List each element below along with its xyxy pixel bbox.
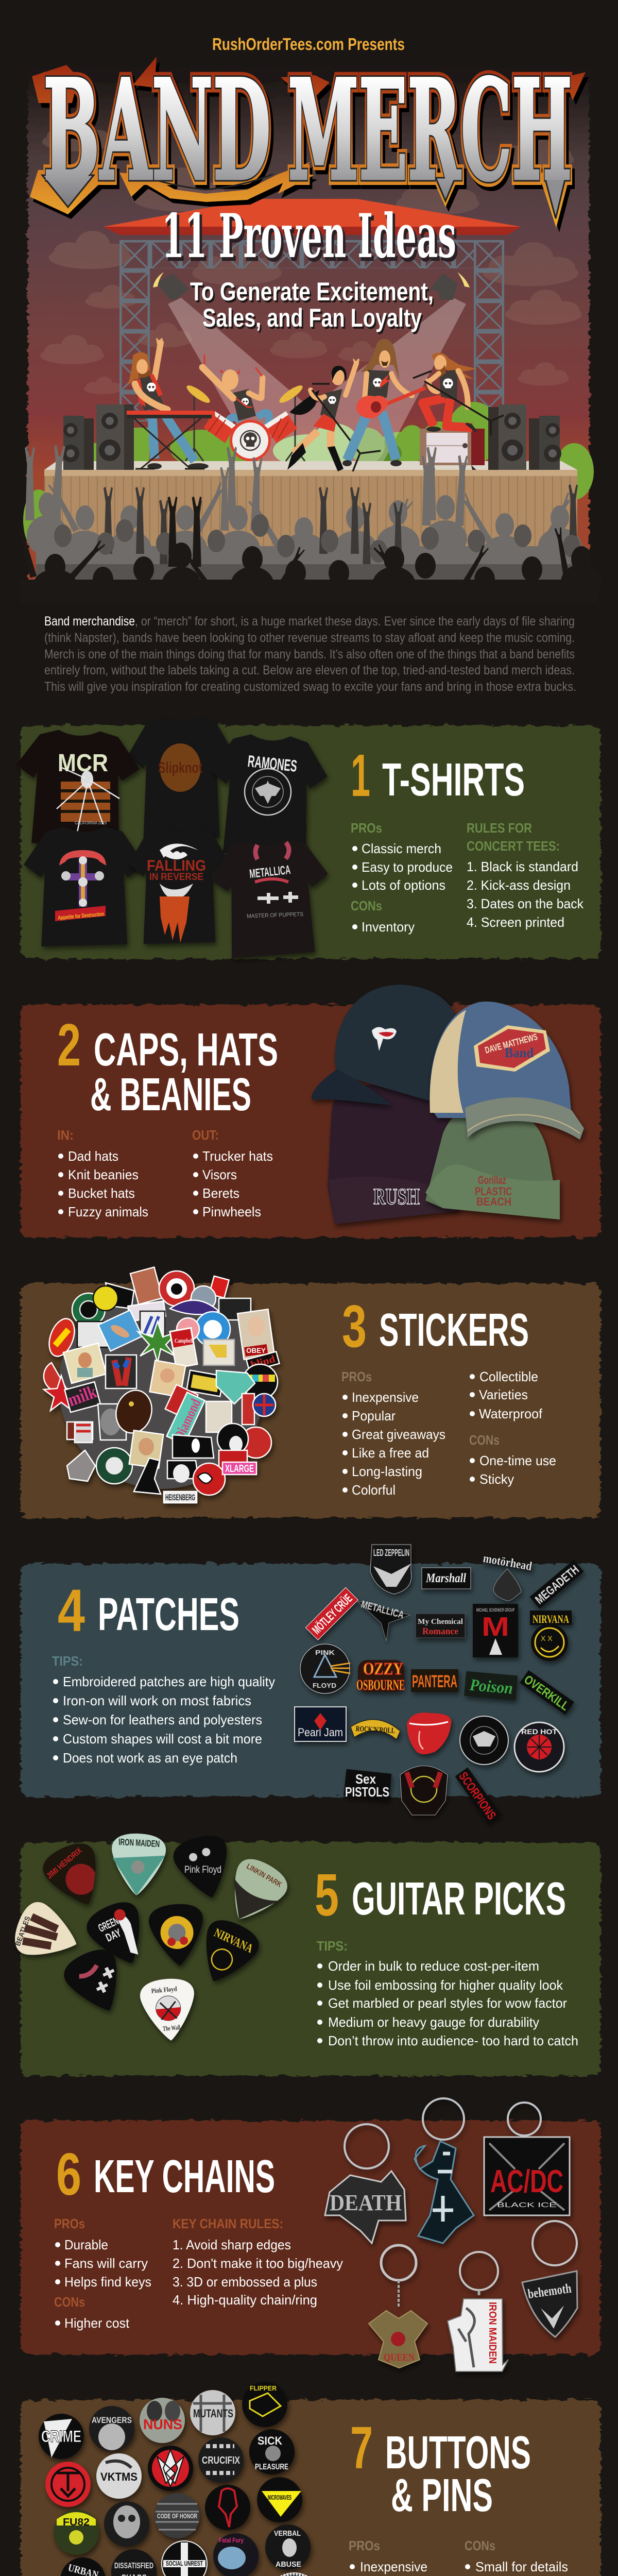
out list: Pinwheels	[202, 1204, 261, 1219]
patch: Nirvana: NIRVANA	[533, 1613, 569, 1625]
shirt: Metallica: MASTER OF PUPPETS	[247, 911, 303, 920]
pros and cons list	[54, 2216, 151, 2331]
tagline	[190, 277, 435, 334]
punk buttons: VERBAL	[274, 2529, 301, 2538]
patch: Rock N Roll	[351, 1720, 400, 1739]
out list: Visors	[202, 1167, 237, 1182]
heading: 1 T-Shirts: 1	[351, 742, 370, 809]
tips list: Iron-on will work on most fabrics	[63, 1693, 251, 1708]
main title: Band Merch: BAND	[43, 49, 271, 212]
patch: Marshall	[422, 1568, 471, 1589]
patch: Poison: Poison	[469, 1675, 513, 1698]
patch: Rock N Roll: ROCK'N'ROLL	[355, 1725, 395, 1735]
key chain: Queen: QUEEN	[384, 2352, 415, 2363]
more pros and cons list: Varieties	[479, 1387, 528, 1402]
patch: My Chemical Romance	[416, 1614, 465, 1638]
shirt: Metallica: METALLICA	[249, 863, 291, 881]
shirt: Falling in Reverse: IN REVERSE	[149, 872, 203, 883]
intro paragraph: Band merchandise	[44, 614, 135, 629]
crowd: back row	[25, 445, 587, 587]
shirt: Falling in Reverse	[129, 826, 230, 944]
punk buttons: SOCIAL UNREST	[166, 2560, 203, 2567]
tips list: Use foil embossing for higher quality look	[328, 1977, 563, 1993]
rules for concert tees	[467, 820, 584, 930]
tips list: TIPS:	[317, 1938, 348, 1954]
sticker bomb collage	[44, 1267, 279, 1503]
panel background	[21, 1005, 600, 1238]
main title: Band Merch: BAND	[43, 49, 271, 212]
shirt: Metallica	[209, 837, 332, 959]
green beanie: Gorillaz	[478, 1174, 506, 1187]
pros list: Great giveaways	[352, 1427, 445, 1442]
heading: 1 T-Shirts	[351, 742, 525, 809]
heading: 1 T-Shirts: T-SHIRTS	[382, 754, 525, 806]
sticker bomb collage: XLARGE	[225, 1463, 254, 1475]
panel 1: t-shirts	[13, 716, 600, 959]
pros and cons list: PROs	[351, 820, 382, 836]
punk buttons: FLIPPER	[250, 2384, 277, 2392]
key chain rules: 1. Avoid sharp edges	[173, 2237, 291, 2252]
pick: Pink Floyd	[170, 1831, 238, 1905]
punk buttons: MICROWAVES	[268, 2494, 291, 2501]
patch: Scorpions	[455, 1768, 501, 1823]
stage deck	[44, 461, 577, 564]
sticker bomb collage: OBEY	[246, 1346, 266, 1354]
patch: Ramones seal	[460, 1716, 508, 1765]
punk buttons: CRIME	[41, 2427, 81, 2446]
presenter line: RushOrderTees.com Presents	[212, 35, 405, 54]
out list: Trucker hats	[202, 1148, 273, 1164]
crowd: middle row	[104, 484, 578, 569]
pros list	[349, 2538, 447, 2576]
pros list: Colorful	[352, 1482, 396, 1498]
pick: The Wall	[139, 1977, 198, 2043]
sticker bomb collage: HEISENBERG	[165, 1493, 195, 1502]
tips list: Custom shapes will cost a bit more	[63, 1731, 262, 1747]
punk buttons: AVENGERS	[92, 2415, 132, 2425]
purple beanie	[328, 1084, 459, 1224]
pros list: Inexpensive	[360, 2559, 427, 2574]
patch: Megadeth	[529, 1560, 584, 1608]
panel 3: stickers	[21, 1267, 600, 1518]
punk buttons: MUTANTS	[193, 2407, 233, 2420]
key chain: Queen	[369, 2245, 427, 2368]
heading: 2 Caps, Hats & Beanies: 2	[57, 1011, 81, 1078]
pick: Jimi Hendrix: JIMI HENDRIX	[45, 1846, 84, 1881]
patch: Pearl Jam	[295, 1707, 346, 1741]
patch: Slayer	[400, 1766, 448, 1815]
key chain rules: 3. 3D or embossed a plus	[173, 2274, 317, 2290]
pick: Metallica	[59, 1943, 134, 2022]
patch: Pantera: PANTERA	[412, 1672, 457, 1691]
pros list: PROs	[341, 1369, 372, 1384]
drum kit	[184, 383, 305, 461]
more pros and cons list: Collectible	[479, 1369, 538, 1384]
rules for concert tees: 2. Kick-ass design	[467, 877, 571, 893]
pick: Green Day	[81, 1895, 157, 1975]
pick: Nirvana	[189, 1913, 264, 1993]
key chain rules: KEY CHAIN RULES:	[173, 2216, 283, 2231]
tagline: Sales, and Fan Loyalty	[204, 306, 423, 334]
key chain: AC/DC: BLACK ICE	[497, 2201, 557, 2209]
key chain: Iron Maiden	[448, 2252, 508, 2371]
panel 5: guitar picks	[9, 1831, 600, 2076]
pick: The Wall: The Wall	[162, 2023, 181, 2032]
metal key chains	[325, 2098, 577, 2371]
heading: 7 Buttons & Pins: BUTTONS	[385, 2427, 531, 2479]
patch: Sex Pistols	[344, 1769, 391, 1801]
rules for concert tees: 4. Screen printed	[467, 914, 564, 930]
cons list: Small for details	[475, 2559, 568, 2574]
tips list: Medium or heavy gauge for durability	[328, 2014, 539, 2030]
patch: Motörhead	[482, 1552, 533, 1601]
tips list	[52, 1653, 275, 1766]
pros list: Popular	[352, 1408, 396, 1423]
heading: 2 Caps, Hats & Beanies: CAPS, HATS	[94, 1024, 278, 1076]
rules for concert tees: RULES FOR	[467, 820, 532, 836]
patch: Red Hot Chili Peppers	[514, 1722, 564, 1772]
punk buttons: NUNS	[143, 2416, 182, 2432]
sticker bomb collage: blind	[250, 1353, 277, 1371]
sky backdrop	[28, 67, 589, 592]
green beanie: BEACH	[476, 1195, 511, 1208]
sticker bomb collage: milk	[65, 1381, 99, 1410]
pros and cons list: Fans will carry	[64, 2256, 148, 2271]
pros and cons list: Easy to produce	[362, 859, 453, 875]
pros and cons list: Lots of options	[362, 877, 445, 893]
cons list: CONs	[465, 2538, 495, 2553]
tagline: Sales, and Fan Loyalty	[202, 303, 422, 332]
shirt: Ramones	[206, 732, 329, 858]
pick: Beatles	[9, 1897, 85, 1970]
patch: Sex Pistols: PISTOLS	[345, 1784, 389, 1800]
pros and cons list: Higher cost	[64, 2315, 130, 2331]
t-shirt photos	[13, 716, 332, 959]
key chain: AC/DC	[484, 2103, 570, 2215]
shirt: Falling in Reverse: FALLING	[147, 857, 206, 874]
pros and cons list: Inventory	[362, 919, 415, 935]
pros list	[341, 1369, 445, 1498]
patch: Pearl Jam: Pearl Jam	[298, 1726, 343, 1739]
cons list	[465, 2538, 572, 2576]
pros and cons list: PROs	[54, 2216, 85, 2231]
sticker bomb collage: Diamond	[171, 1396, 204, 1443]
patch: Megadeth: MEGADETH	[533, 1563, 582, 1607]
heading: 3 Stickers: 3	[342, 1293, 367, 1360]
heading: 5 Guitar Picks: 5	[315, 1861, 339, 1928]
pick: Nirvana: NIRVANA	[212, 1926, 255, 1956]
tagline: To Generate Excitement,	[190, 277, 434, 306]
patch: Ozzy Osbourne	[356, 1659, 405, 1693]
pick: Jimi Hendrix	[43, 1843, 99, 1908]
pick: Guns N Roses	[147, 1902, 207, 1968]
patch: Poison	[464, 1671, 518, 1700]
patch: Nirvana	[530, 1611, 572, 1661]
heading: 4 Patches: PATCHES	[98, 1589, 239, 1640]
shirt: Slipknot	[128, 716, 235, 840]
patch: Motörhead: motörhead	[482, 1552, 533, 1573]
more pros and cons list: One-time use	[479, 1453, 556, 1468]
purple beanie: RUSH	[373, 1184, 420, 1209]
patch: Marshall: Marshall	[425, 1571, 466, 1585]
out list: Berets	[202, 1185, 239, 1201]
punk buttons: Fatal Fury	[219, 2536, 244, 2544]
shirt: MCR: MCR	[58, 750, 108, 777]
out list: OUT:	[192, 1127, 219, 1143]
tips list: Get marbled or pearl styles for wow factor	[328, 1995, 567, 2011]
patch: Ozzy Osbourne: OZZY	[363, 1659, 403, 1679]
heading: 2 Caps, Hats & Beanies	[57, 1011, 278, 1121]
patch: Overkill: OVERKILL	[521, 1672, 572, 1714]
shirt: MCR: CALIFORNIA 2019	[75, 821, 107, 825]
patch: Nirvana: X X	[541, 1634, 553, 1642]
panel background	[21, 1564, 600, 1797]
printed guitar picks	[9, 1831, 294, 2043]
key chain rules: 2. Don't make it too big/heavy	[173, 2256, 343, 2271]
amp	[420, 429, 485, 470]
heading: 6 Key Chains	[56, 2141, 275, 2208]
patch: Pink Floyd	[300, 1644, 350, 1693]
stage roof	[103, 199, 521, 235]
patch: Red Hot Chili Peppers: RED HOT	[521, 1727, 557, 1736]
rules for concert tees: CONCERT TEES:	[467, 838, 560, 854]
pros list: Long-lasting	[352, 1464, 422, 1479]
key chain: Behemoth	[522, 2221, 577, 2337]
panel background	[21, 725, 600, 959]
rules for concert tees: 3. Dates on the back	[467, 896, 584, 911]
heading: 4 Patches	[58, 1577, 239, 1644]
guitarist	[342, 339, 425, 466]
panel background	[21, 2400, 600, 2576]
patch: Motley Crue: MÖTLEY CRÜE	[310, 1591, 355, 1637]
clouds	[40, 119, 581, 394]
singer with mic	[287, 359, 381, 471]
key chain: Iron Maiden: IRON MAIDEN	[487, 2302, 498, 2364]
pick: Iron Maiden: IRON MAIDEN	[118, 1837, 160, 1849]
shirt: Guns N' Roses: Appetite for Destruction	[58, 911, 105, 921]
key chain: AC/DC: AC/DC	[490, 2164, 563, 2199]
out list	[192, 1127, 273, 1219]
key chain: Behemoth: behemoth	[527, 2281, 573, 2301]
keyboard	[127, 411, 214, 469]
shirt: Slipknot: Slipknot	[158, 759, 202, 776]
green bushes	[23, 402, 594, 551]
key chain: Death: DEATH	[330, 2190, 402, 2215]
panel 4: patches	[21, 1545, 600, 1823]
green beanie	[425, 1104, 560, 1219]
punk buttons: CODE OF HONOR	[157, 2512, 197, 2520]
panel background	[21, 1283, 600, 1518]
panel background	[21, 2121, 600, 2354]
heading: 6 Key Chains: KEY CHAINS	[94, 2151, 275, 2202]
in list: Bucket hats	[68, 1185, 135, 1201]
more pros and cons list: CONs	[469, 1432, 500, 1448]
in list: Fuzzy animals	[68, 1204, 148, 1219]
key chain: Ozzy cross	[415, 2098, 474, 2243]
subtitle: 11 Proven Ideas	[162, 200, 458, 275]
pros and cons list: Helps find keys	[64, 2274, 151, 2290]
patch: Metallica: METALLICA	[360, 1599, 405, 1621]
shirt: MCR	[13, 728, 141, 847]
punk buttons: DISSATISFIED	[114, 2562, 153, 2570]
pros list: Like a free ad	[352, 1445, 429, 1461]
heading: 4 Patches: 4	[58, 1577, 85, 1644]
pros and cons list	[351, 820, 453, 935]
pale bushes in the light	[273, 423, 385, 467]
tips list: Don’t throw into audience- too hard to catch	[328, 2033, 578, 2048]
patch: Led Zeppelin: LED ZEPPELIN	[373, 1548, 409, 1558]
speakers	[62, 404, 561, 470]
heading: 7 Buttons & Pins: 7	[350, 2414, 373, 2481]
panel background	[21, 1842, 600, 2076]
punk buttons: SICK	[258, 2434, 282, 2447]
spotlight beams	[168, 298, 466, 461]
patch: Pantera	[411, 1669, 458, 1692]
in list: Dad hats	[68, 1148, 118, 1164]
photos: caps and beanies	[312, 985, 584, 1224]
main title: Band Merch: BAND	[46, 54, 273, 216]
navy dad cap	[312, 985, 461, 1108]
patch: Led Zeppelin	[370, 1545, 411, 1594]
pick: Green Day: GREEN	[96, 1914, 121, 1935]
drummer	[202, 354, 269, 428]
tips list: Sew-on for leathers and polyesters	[63, 1712, 262, 1727]
stage lamps	[153, 272, 470, 300]
key chain: Death	[325, 2124, 406, 2243]
patch: My Chemical Romance: Romance	[422, 1626, 458, 1636]
stage truss	[119, 240, 504, 421]
pick: Green Day: DAY	[104, 1926, 123, 1944]
heading: 5 Guitar Picks	[315, 1861, 566, 1928]
more pros and cons list: Waterproof	[479, 1406, 543, 1421]
patch: MSG: M	[482, 1612, 509, 1642]
pick: Pink Floyd: Pink Floyd	[184, 1865, 221, 1875]
blue trucker cap	[430, 1002, 584, 1140]
rules for concert tees: 1. Black is standard	[467, 859, 578, 874]
hero illustration: concert stage	[16, 67, 602, 603]
pick: Beatles: BEATLES	[13, 1915, 32, 1947]
panel 6: key chains	[21, 2098, 600, 2371]
patch: MSG: MICHAEL SCHENKER GROUP	[476, 1607, 514, 1613]
tagline: To Generate Excitement,	[192, 279, 435, 308]
patch: Motley Crue	[305, 1587, 358, 1640]
key chain rules: 4. High-quality chain/ring	[173, 2292, 317, 2308]
heading: 7 Buttons & Pins	[350, 2414, 531, 2521]
pick: The Wall: Pink Floyd	[151, 1985, 178, 1995]
heading: 2 Caps, Hats & Beanies: & BEANIES	[90, 1069, 251, 1121]
patch: My Chemical Romance: My Chemical	[418, 1618, 463, 1626]
heading: 7 Buttons & Pins: & PINS	[391, 2470, 493, 2521]
panel 7: buttons and pins	[21, 2382, 600, 2576]
punk buttons: FU82	[63, 2517, 90, 2528]
embroidered band patches	[295, 1545, 584, 1823]
pick: Iron Maiden	[109, 1832, 167, 1897]
main title: Band Merch: BAND	[43, 49, 271, 212]
pros list: Inexpensive	[352, 1389, 419, 1405]
title block	[30, 35, 589, 334]
punk buttons: PLEASURE	[255, 2463, 288, 2471]
more pros and cons list	[469, 1369, 556, 1487]
green beanie: PLASTIC	[475, 1185, 512, 1198]
tips list: Order in bulk to reduce cost-per-item	[328, 1958, 539, 1974]
heading: 3 Stickers	[342, 1293, 529, 1360]
tips list: Embroidered patches are high quality	[63, 1674, 275, 1689]
punk buttons: VKTMS	[100, 2470, 138, 2483]
patch: Sex Pistols: Sex	[355, 1771, 376, 1787]
keyboard player	[128, 338, 209, 469]
pick: Linkin Park: LINKIN PARK	[245, 1862, 283, 1889]
patch: MSG	[473, 1604, 518, 1657]
tips list	[317, 1938, 578, 2048]
in list: Knit beanies	[68, 1167, 139, 1182]
patch: Rolling Stones tongue	[407, 1713, 451, 1754]
blue trucker cap: DAVE MATTHEWS	[484, 1031, 539, 1056]
tips list: TIPS:	[52, 1653, 83, 1669]
pros and cons list: CONs	[351, 898, 382, 913]
pros and cons list: Durable	[64, 2237, 108, 2252]
patch: Pink Floyd: PINK	[315, 1649, 335, 1656]
key chain rules	[173, 2216, 343, 2308]
crowd: front row	[16, 497, 602, 603]
sticker bomb collage: Campbell	[175, 1337, 193, 1344]
patch: Ozzy Osbourne: OSBOURNE	[356, 1677, 405, 1693]
punk buttons: CRUCIFIX	[202, 2455, 241, 2466]
pick: Linkin Park	[215, 1852, 294, 1933]
panel 2: caps, hats and beanies	[21, 985, 600, 1238]
pros and cons list: CONs	[54, 2294, 85, 2310]
intro paragraph	[44, 614, 576, 694]
more pros and cons list: Sticky	[479, 1471, 514, 1487]
shirt: Guns N' Roses	[24, 826, 145, 946]
patch: Metallica	[357, 1599, 410, 1641]
tips list: Does not work as an eye patch	[63, 1750, 237, 1766]
patch: Pink Floyd: FLOYD	[313, 1682, 336, 1689]
heading: 6 Key Chains: 6	[56, 2141, 81, 2208]
punk buttons	[39, 2382, 317, 2576]
pros and cons list: Classic merch	[362, 841, 441, 856]
patch: Scorpions: SCORPIONS	[456, 1770, 499, 1822]
in list	[57, 1127, 148, 1219]
pros list: PROs	[349, 2538, 380, 2553]
shirt: Ramones: RAMONES	[247, 752, 298, 775]
blue trucker cap: Band	[505, 1045, 534, 1060]
punk buttons: ABUSE	[276, 2560, 301, 2569]
in list: IN:	[57, 1127, 74, 1143]
heading: 3 Stickers: STICKERS	[379, 1304, 529, 1356]
vocalist on amp	[413, 352, 504, 435]
